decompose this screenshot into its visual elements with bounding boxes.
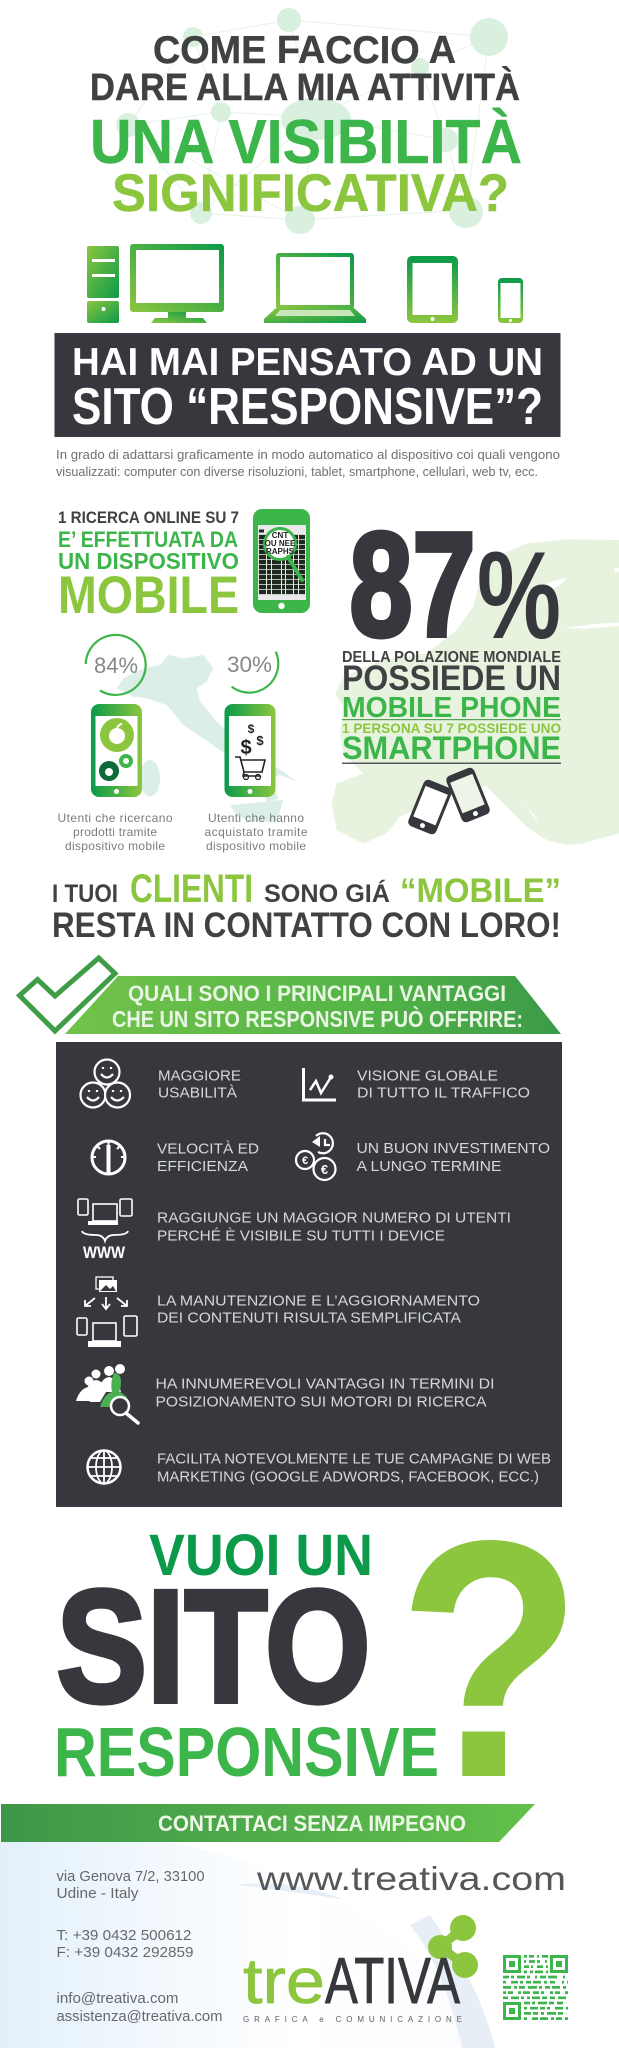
heading: your clients are mobile: SONO GIÁ [264, 879, 390, 908]
background: map of Europe [332, 539, 619, 845]
text: web marketing [157, 1450, 551, 1486]
heading: do you want a responsive site [54, 1523, 439, 1791]
caption: users purchasing: Utenti che hanno [208, 811, 304, 825]
stat: mobile phone ownership: MOBILE PHONE [342, 692, 561, 724]
icon: phone with cart: $ [256, 733, 264, 748]
icon: phone with apples [91, 704, 142, 797]
stat: 30 percent: 30% [227, 652, 272, 677]
text: investment: A LUNGO TERMINE [356, 1158, 502, 1175]
text: simplified maintenance: DEI CONTENUTI RISULTA SEMPLIFICATA [157, 1310, 461, 1326]
stat: one search in seven: UN DISPOSITIVO [58, 548, 239, 574]
icon: globe [88, 1450, 120, 1484]
text: usability: USABILITÀ [158, 1084, 237, 1102]
icon: people and magnifier [76, 1364, 138, 1423]
text: usability [158, 1068, 241, 1102]
stat: mobile phone ownership: POSSIEDE UN [342, 659, 561, 698]
stat: one search in seven: MOBILE [58, 566, 239, 625]
contact details: assistenza@treativa.com [56, 2008, 222, 2025]
icon: smiling faces [80, 1060, 130, 1108]
heading: your clients are mobile: “MOBILE” [400, 872, 561, 910]
title: DARE ALLA MIA ATTIVITÀ [90, 65, 520, 109]
icon: devices and www [78, 1199, 132, 1262]
banner: responsive question: SITO “RESPONSIVE”? [72, 378, 543, 436]
caption: users purchasing: acquistato tramite [204, 825, 308, 839]
text: speed: VELOCITÀ ED [157, 1140, 259, 1158]
icon: big question mark: ? [398, 1470, 582, 1848]
text: search ranking: HA INNUMEREVOLI VANTAGGI IN TERMINI DI [156, 1376, 494, 1392]
intro paragraph: In grado di adattarsi graficamente in modo automatico al dispositivo coi quali vengono [56, 447, 560, 462]
logo: treATIVA [243, 1915, 478, 2024]
icon: phone with cart: $ [240, 737, 252, 759]
caption: users purchasing [204, 811, 308, 853]
banner: contact us: CONTATTACI SENZA IMPEGNO [158, 1811, 466, 1836]
banner: advantages heading [65, 976, 561, 1034]
caption: users searching: prodotti tramite [73, 825, 157, 839]
banner: advantages heading: QUALI SONO I PRINCIPALI VANTAGGI [128, 981, 506, 1006]
text: investment [356, 1140, 550, 1175]
stat: one search in seven [58, 508, 239, 625]
icon: phone with magnifier [253, 509, 310, 613]
stat: one search in seven: 1 RICERCA ONLINE SU 7 [58, 508, 239, 527]
stat: 87 percent: % [477, 527, 561, 665]
icon: traffic chart [304, 1068, 336, 1100]
stat: one search in seven: E’ EFFETTUATA DA [58, 527, 238, 552]
title: COME FACCIO A [153, 29, 456, 72]
icon: desktop computer [87, 244, 224, 323]
text: simplified maintenance [157, 1292, 480, 1326]
panel: advantages [56, 1042, 562, 1507]
heading: do you want a responsive site: RESPONSIVE [54, 1713, 439, 1791]
banner: responsive question: HAI MAI PENSATO AD UN [72, 341, 543, 384]
text: investment: UN BUON INVESTIMENTO [356, 1140, 550, 1157]
text: traffic overview: DI TUTTO IL TRAFFICO [357, 1084, 530, 1102]
stat: mobile phone ownership: 1 PERSONA SU 7 POSSIEDE UNO [342, 720, 561, 736]
text: web marketing: FACILITA NOTEVOLMENTE LE TUE CAMPAGNE DI WEB [157, 1450, 551, 1468]
icon: phone with cart [224, 704, 276, 797]
icon: two dark phones [407, 766, 491, 836]
contact details: F: +39 0432 292859 [56, 1944, 194, 1961]
heading: your clients are mobile: RESTA IN CONTATTO CON LORO! [52, 906, 561, 945]
text: reach more users: RAGGIUNGE UN MAGGIOR NUMERO DI UTENTI [157, 1210, 511, 1226]
icon: phone with magnifier: RAPHS [266, 547, 295, 556]
footer background: globe [0, 1842, 495, 2048]
title: UNA VISIBILITÀ [90, 108, 522, 177]
icon: speed gauge [92, 1141, 125, 1174]
stat: mobile phone ownership: SMARTPHONE [342, 730, 561, 766]
intro paragraph: visualizzati: computer con diverse risoluzioni, tablet, smartphone, cellulari, web tv, ecc. [56, 464, 538, 479]
icon: long term investment [296, 1133, 336, 1180]
stat: 30 percent [227, 652, 278, 693]
text: usability: MAGGIORE [158, 1068, 241, 1084]
text: search ranking [156, 1376, 494, 1410]
icon: smartphone [498, 278, 523, 323]
banner: advantages heading: CHE UN SITO RESPONSIVE PUÒ OFFRIRE: [112, 1005, 523, 1032]
banner: responsive question [54, 333, 560, 437]
stat: mobile phone ownership: DELLA POLAZIONE MONDIALE [342, 649, 561, 666]
caption: users searching: dispositivo mobile [65, 839, 165, 853]
contact details: Udine - Italy [56, 1885, 139, 1902]
icon: long term investment: € [321, 1162, 328, 1177]
stat: mobile phone ownership [342, 649, 561, 766]
stat: 84 percent: 84% [94, 653, 138, 678]
logo: treATIVA: GRAFICA e COMUNICAZIONE [243, 2015, 462, 2024]
title [90, 29, 522, 223]
heading: your clients are mobile: I TUOI [52, 880, 118, 908]
text: reach more users: PERCHÉ È VISIBILE SU TUTTI I DEVICE [157, 1228, 445, 1244]
stat: 84 percent [86, 635, 146, 695]
contact details: T: +39 0432 500612 [56, 1927, 192, 1944]
text: search ranking: POSIZIONAMENTO SUI MOTORI DI RICERCA [156, 1394, 486, 1410]
caption: users purchasing: dispositivo mobile [206, 839, 306, 853]
logo: treATIVA: ATIVA [325, 1944, 460, 2017]
icon: long term investment: € [302, 1155, 308, 1167]
contact details: via Genova 7/2, 33100 [56, 1868, 204, 1885]
icon: check mark [20, 958, 115, 1031]
heading: do you want a responsive site: VUOI UN [149, 1523, 373, 1588]
QR code [503, 1956, 568, 2019]
background: map of Italy [117, 655, 297, 822]
title: SIGNIFICATIVA? [112, 164, 509, 223]
icon: phone with cart: $ [248, 722, 255, 736]
stat: 87 percent: 87 [350, 502, 476, 668]
text: traffic overview: VISIONE GLOBALE [357, 1068, 498, 1084]
icon: content updates [77, 1277, 137, 1347]
heading: do you want a responsive site: SITO [56, 1556, 370, 1736]
icon: devices and www: WWW [83, 1243, 126, 1262]
website address: www.treativa.com [256, 1860, 566, 1897]
caption: users searching [58, 811, 173, 853]
contact details [56, 1868, 222, 2025]
icon: laptop [264, 253, 366, 323]
background: network of circles [116, 8, 508, 234]
icon: tablet [407, 256, 458, 323]
caption: users searching: Utenti che ricercano [58, 811, 173, 825]
text: speed [157, 1140, 259, 1175]
heading: your clients are mobile [52, 867, 561, 945]
text: simplified maintenance: LA MANUTENZIONE E L’AGGIORNAMENTO [157, 1292, 480, 1310]
text: reach more users [157, 1210, 511, 1244]
heading: your clients are mobile: CLIENTI [130, 867, 253, 911]
contact details: info@treativa.com [56, 1990, 178, 2007]
intro paragraph [56, 447, 560, 479]
banner: contact us [1, 1804, 535, 1842]
text: traffic overview [357, 1068, 530, 1102]
logo: treATIVA: tre [243, 1945, 325, 2017]
icon: phone with magnifier: OU NEE [265, 539, 296, 548]
text: speed: EFFICIENZA [157, 1158, 248, 1175]
text: web marketing: MARKETING (GOOGLE ADWORDS, FACEBOOK, ECC.) [157, 1468, 539, 1486]
icon: phone with magnifier: CNT [272, 531, 288, 540]
